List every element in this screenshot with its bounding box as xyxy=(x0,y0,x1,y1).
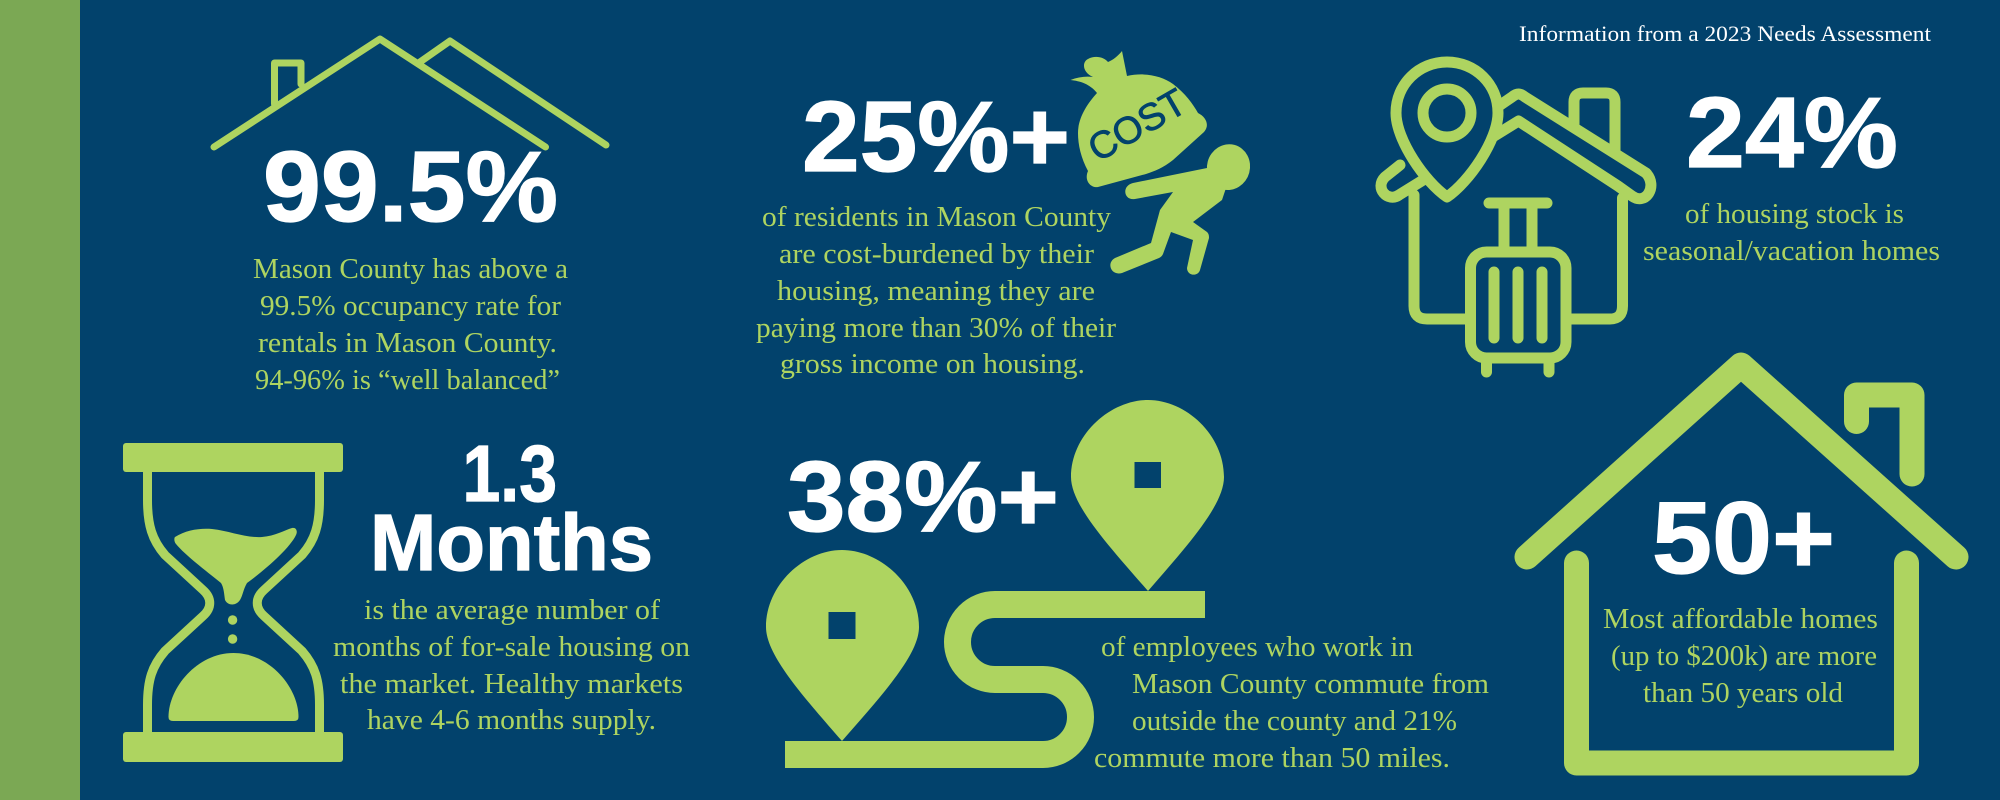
statistic: 25%+: 25%+ xyxy=(802,81,1070,193)
description: occupancy: Mason County has above a xyxy=(253,254,569,285)
description: older homes: than 50 years old xyxy=(1643,678,1843,709)
panel: commuters xyxy=(766,400,1489,774)
statistic: 99.5%: 99.5% xyxy=(263,131,558,243)
description: older homes xyxy=(1603,604,1878,709)
description: commuters: commute more than 50 miles. xyxy=(1094,743,1450,774)
panel: months of supply xyxy=(123,429,690,762)
description: months of supply: is the average number of xyxy=(364,595,661,626)
description: cost burden: of residents in Mason County xyxy=(762,202,1111,233)
icon part: upper pin xyxy=(1071,400,1224,591)
description: older homes: (up to $200k) are more xyxy=(1611,641,1877,672)
icon: winding road with two pins xyxy=(766,400,1224,754)
description: cost burden xyxy=(756,202,1117,380)
icon part: lower pin xyxy=(766,550,919,741)
description: commuters xyxy=(1094,632,1489,774)
statistic: 1.3 Months: 1.3 xyxy=(462,429,557,518)
description: occupancy xyxy=(253,254,569,396)
statistic: 38%+: 38%+ xyxy=(787,441,1059,553)
description: months of supply: have 4-6 months supply. xyxy=(367,705,656,736)
panel: seasonal homes xyxy=(1381,62,1940,372)
icon: hourglass xyxy=(123,443,343,762)
description: months of supply: the market. Healthy markets xyxy=(340,669,683,700)
description: cost burden: gross income on housing. xyxy=(780,349,1085,380)
bag label: COST: COST xyxy=(1081,81,1194,170)
description: occupancy: 99.5% occupancy rate for xyxy=(260,291,562,322)
description: cost burden: paying more than 30% of their xyxy=(756,313,1117,344)
description: occupancy: 94-96% is “well balanced” xyxy=(255,365,560,396)
source note: Information from a 2023 Needs Assessment xyxy=(1519,21,1931,46)
panel: older affordable homes xyxy=(1527,365,1956,763)
description: occupancy: rentals in Mason County. xyxy=(258,328,557,359)
description: seasonal homes xyxy=(1643,199,1940,267)
statistic: 1.3 Months xyxy=(370,429,653,587)
icon: house roofline xyxy=(214,39,606,147)
description: months of supply xyxy=(333,595,690,736)
description: commuters: outside the county and 21% xyxy=(1132,706,1457,737)
icon: person carrying cost bag xyxy=(1070,51,1255,275)
icon: house outline xyxy=(1527,365,1956,763)
icon part: location pin xyxy=(1396,62,1498,197)
icon part: walls xyxy=(1414,195,1622,319)
statistic: 50+: 50+ xyxy=(1652,481,1835,595)
statistic: 24%: 24% xyxy=(1686,77,1898,189)
panel: occupancy rate xyxy=(214,39,606,396)
panel: cost burden xyxy=(756,51,1255,380)
icon part: roof xyxy=(1381,94,1651,199)
description: commuters: Mason County commute from xyxy=(1132,669,1489,700)
description: cost burden: are cost-burdened by their xyxy=(779,239,1095,270)
description: commuters: of employees who work in xyxy=(1101,632,1413,663)
icon part: suitcase xyxy=(1470,252,1566,358)
description: cost burden: housing, meaning they are xyxy=(777,276,1095,307)
description: months of supply: months of for-sale housing on xyxy=(333,632,690,663)
statistic: 1.3 Months: Months xyxy=(370,498,653,587)
green sidebar xyxy=(0,0,80,800)
description: seasonal homes: of housing stock is xyxy=(1685,199,1904,230)
icon part: chimney xyxy=(1574,93,1615,150)
icon part: road xyxy=(785,604,1205,754)
description: older homes: Most affordable homes xyxy=(1603,604,1878,635)
description: seasonal homes: seasonal/vacation homes xyxy=(1643,236,1940,267)
icon: house with pin and suitcase xyxy=(1381,62,1651,372)
icon part: person figure xyxy=(1110,139,1255,275)
